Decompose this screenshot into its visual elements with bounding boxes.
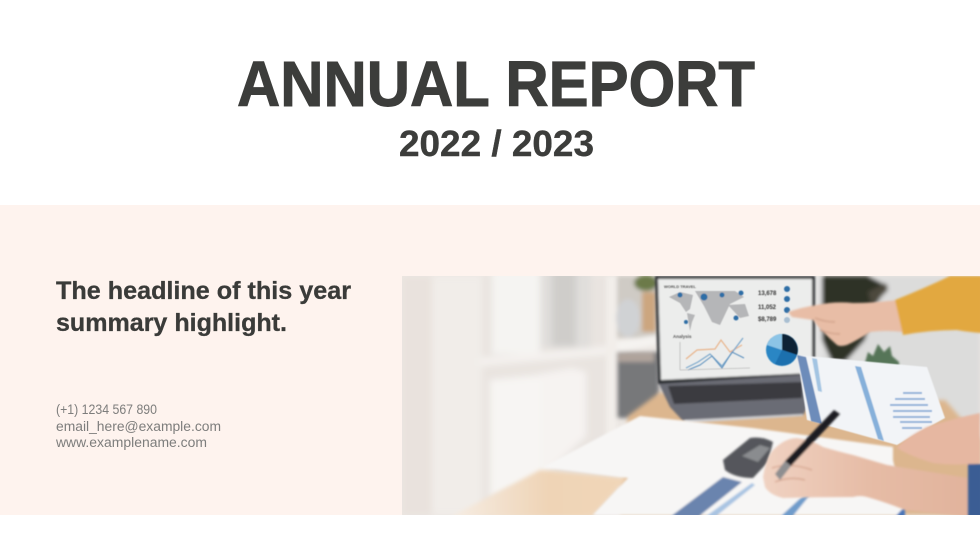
report paper front left xyxy=(543,416,905,517)
right wall and plant xyxy=(815,276,980,421)
panel: peach band xyxy=(0,205,980,515)
shelves and binders xyxy=(482,276,604,492)
subtitle: years: 2022 / 2023 xyxy=(399,123,594,164)
calculator xyxy=(723,438,773,478)
table xyxy=(450,392,980,517)
laptop screen content: Analysis xyxy=(673,334,692,339)
laptop screen content: $8,789 xyxy=(758,317,777,323)
pointing hand and yellow sleeve xyxy=(788,276,980,346)
report held in hand xyxy=(797,355,945,445)
laptop xyxy=(655,276,815,423)
laptop screen content xyxy=(664,284,798,370)
hand holding report xyxy=(897,413,980,517)
contact details: (+1) 1234 567 890 xyxy=(56,402,157,417)
headline xyxy=(56,277,351,337)
photo: team reviewing reports xyxy=(402,270,980,517)
laptop body xyxy=(655,276,815,423)
contact details xyxy=(55,402,221,450)
headline: summary highlight. xyxy=(56,309,287,337)
title: ANNUAL REPORT xyxy=(237,48,755,120)
headline: The headline of this year xyxy=(56,277,351,305)
laptop screen content: 11,052 xyxy=(758,305,777,311)
hand with pen xyxy=(763,410,972,517)
pie chart xyxy=(766,334,798,366)
contact details: email_here@example.com xyxy=(56,419,221,434)
contact details: www.examplename.com xyxy=(55,435,207,450)
laptop screen content: 13,678 xyxy=(758,291,777,297)
small succulent xyxy=(864,344,899,367)
laptop screen content: WORLD TRAVEL xyxy=(664,284,696,289)
